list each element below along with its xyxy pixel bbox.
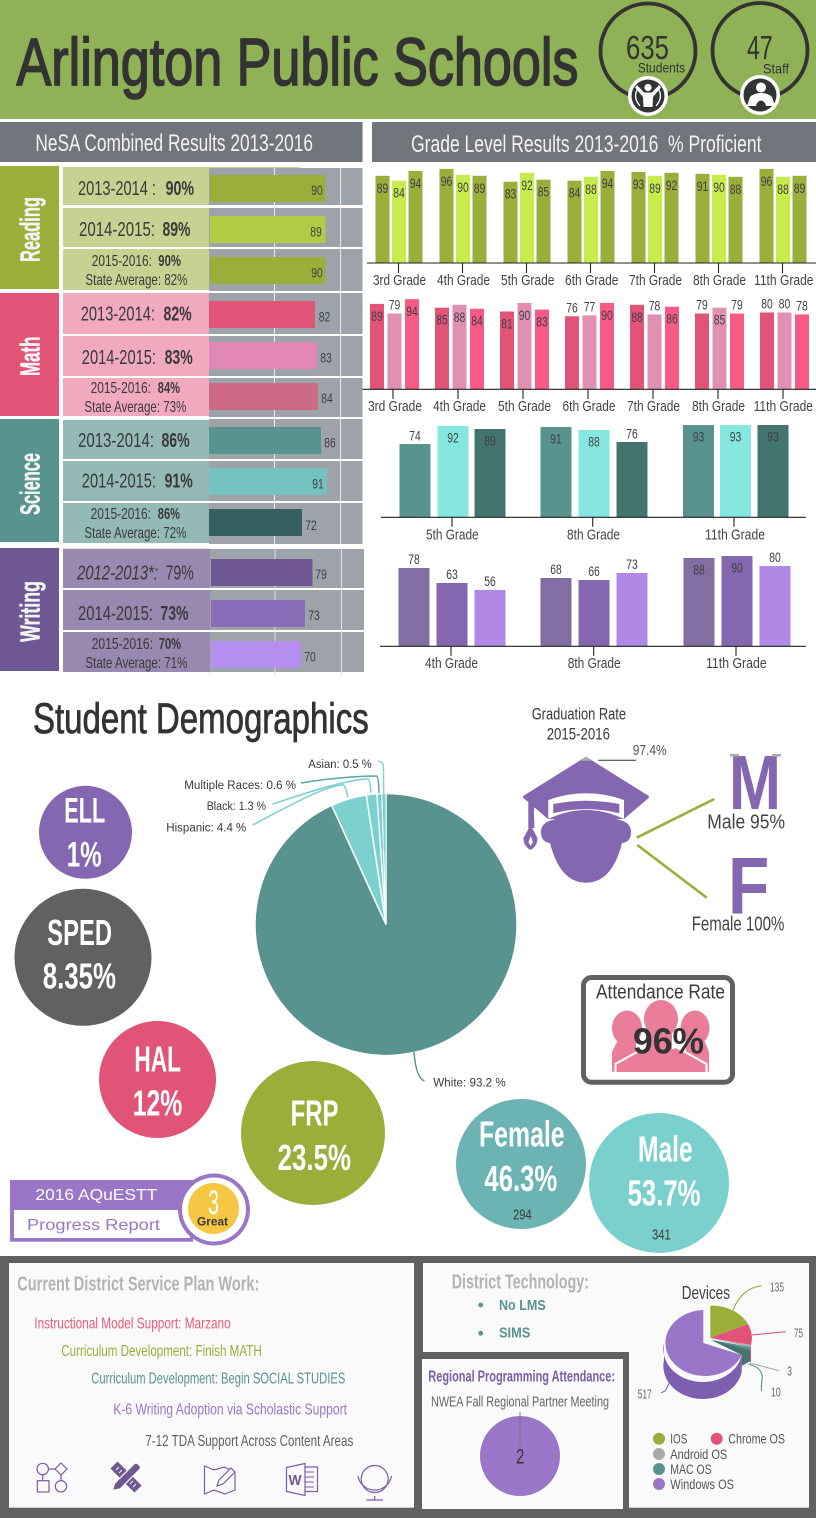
panel: writing combined results: 73% [160, 603, 189, 625]
bar chart: math by grade: 85 [714, 312, 725, 328]
bar chart: reading by grade: 89 [377, 180, 388, 196]
graduation rate [523, 704, 785, 936]
bar chart: math by grade: 85 [436, 312, 448, 328]
icon: staff reader [740, 75, 780, 115]
devices legend [653, 1432, 785, 1492]
bar chart: math by grade: 78 [796, 297, 808, 313]
graduation rate: Male 95% [707, 811, 785, 833]
bar chart: writing by grade: 8th Grade [568, 655, 621, 672]
icon: letter M: M [729, 740, 781, 826]
icon: letter F: F [728, 842, 769, 932]
bar chart: science by grade: 88 [588, 434, 600, 450]
bar chart: math by grade: 3rd Grade [368, 398, 422, 415]
bar chart: science by grade: 93 [693, 429, 704, 445]
bar chart: reading by grade: 85 [538, 184, 549, 200]
bar chart: math by grade: 78 [649, 297, 660, 313]
attendance rate callout: Attendance Rate [596, 982, 725, 1004]
panel: regional programming attendance: Regional Programming Attendance: [428, 1369, 615, 1386]
panel: reading combined results: 2015-2016: [92, 253, 152, 270]
stat circle: SPED [14, 889, 152, 1026]
panel: math combined results: 84% [158, 380, 180, 397]
graduation rate: Female 100% [692, 914, 784, 936]
panel: writing combined results: 2012-2013*: [76, 563, 158, 585]
bar chart: math by grade: 88 [454, 309, 465, 325]
bar chart: reading by grade: 90 [713, 179, 725, 195]
bar chart: writing by grade [380, 549, 806, 672]
bar chart: reading by grade: 89 [649, 180, 661, 196]
bar chart: math by grade: 79 [731, 296, 743, 312]
heading: student demographics: Student Demographics [33, 695, 369, 743]
bar chart: writing by grade: 68 [550, 561, 562, 577]
bar chart: reading by grade: 92 [521, 177, 533, 193]
title: Arlington Public Schools [16, 25, 578, 100]
bar chart: math by grade: 88 [631, 309, 643, 325]
bar chart: science by grade: 8th Grade [567, 526, 620, 543]
panel: writing combined results: 2015-2016: [92, 636, 153, 653]
stat circle: FRP: 23.5% [278, 1137, 351, 1178]
bar chart: reading by grade: 3rd Grade [373, 272, 426, 289]
heading: NeSA combined results [0, 122, 362, 162]
bar chart: science by grade: 91 [550, 431, 562, 447]
bar chart: math by grade [362, 296, 816, 415]
icon: pencil and ruler [110, 1461, 142, 1493]
panel: current district service plan work: Curriculum Development: Begin SOCIAL STUDIES [91, 1370, 345, 1387]
panel: current district service plan work: Current District Service Plan Work: [17, 1274, 259, 1296]
bar chart: writing by grade: 11th Grade [706, 655, 767, 672]
bar chart: reading by grade: 8th Grade [693, 272, 746, 289]
pie chart: regional attendance [480, 1412, 560, 1496]
students counter: Students [638, 60, 685, 76]
panel: science combined results: 2014-2015: [82, 471, 156, 493]
staff counter: Staff [763, 61, 789, 77]
bar chart: writing by grade: 73 [626, 556, 638, 572]
panel: math combined results: 82 [319, 309, 330, 325]
stat circle: SPED: 8.35% [43, 955, 116, 996]
panel: math combined results: 2014-2015: [82, 347, 156, 369]
panel: science combined results [0, 419, 362, 544]
3D pie chart: devices: 135 [770, 1280, 784, 1295]
bar chart: writing by grade: 66 [588, 563, 600, 579]
devices legend: IOS [670, 1432, 687, 1447]
bar chart: math by grade: 81 [501, 316, 513, 332]
devices legend: Android OS [670, 1447, 727, 1462]
pie chart: regional attendance: 2 [516, 1445, 524, 1468]
panel: reading combined results [0, 166, 362, 291]
panel: math combined results: 84 [321, 390, 333, 406]
panel: reading combined results: State Average: 82% [85, 272, 187, 289]
panel: science combined results: 72 [305, 517, 317, 533]
stat circle: male [589, 1113, 729, 1253]
bar chart: reading by grade: 88 [777, 181, 789, 197]
panel: current district service plan work: K-6 Writing Adoption via Scholastic Support [113, 1401, 347, 1418]
bar chart: reading by grade: 83 [505, 186, 516, 202]
staff counter: 47 [747, 29, 773, 66]
panel: science combined results: 86% [158, 506, 180, 523]
bar chart: science by grade: 74 [409, 428, 421, 444]
3D pie chart: devices: 3 [787, 1364, 792, 1379]
3D pie chart: devices: 517 [638, 1386, 652, 1401]
panel: district technology: District Technology: [452, 1271, 589, 1293]
bar chart: math by grade: 79 [696, 296, 708, 312]
panel: math combined results: 83 [320, 350, 332, 366]
panel: science combined results: State Average: 72% [84, 525, 186, 542]
bar chart: science by grade: 89 [484, 433, 496, 449]
bar chart: science by grade: 93 [730, 429, 741, 445]
panel: writing combined results: 70 [304, 649, 316, 665]
bar chart: reading by grade: 6th Grade [565, 272, 618, 289]
heading: grade level results [372, 122, 816, 162]
panel: science combined results: 2015-2016: [91, 506, 151, 523]
bar chart: writing by grade: 78 [408, 551, 420, 567]
bar chart: math by grade: 8th Grade [692, 398, 745, 415]
bar chart: reading by grade: 94 [410, 175, 421, 191]
bar chart: reading by grade: 84 [569, 185, 580, 201]
stat circle: HAL [99, 1021, 216, 1138]
bar chart: reading by grade: 89 [474, 180, 485, 196]
bar chart: reading by grade: 96 [441, 173, 452, 189]
bar chart: writing by grade: 56 [484, 573, 496, 589]
bar chart: science by grade [381, 425, 806, 543]
bar chart: math by grade: 79 [389, 296, 400, 312]
bar chart: math by grade: 84 [471, 313, 483, 329]
bar chart: writing by grade: 80 [769, 549, 781, 565]
panel: math combined results: 83% [165, 347, 193, 369]
panel: district technology: SIMS [499, 1325, 530, 1342]
icon: graduate with cap [523, 757, 649, 883]
panel: reading combined results: 2013-2014 : [78, 178, 156, 200]
panel: writing combined results: 73 [308, 607, 320, 623]
stat circle: male: Male [638, 1129, 693, 1170]
bar chart: math by grade: 89 [371, 308, 383, 324]
stat circle: HAL: HAL [134, 1039, 181, 1080]
panel: writing combined results: Writing [15, 581, 46, 642]
stat circle: female: 294 [513, 1206, 532, 1223]
bar chart: writing by grade: 4th Grade [425, 655, 478, 672]
bar chart: science by grade: 11th Grade [705, 526, 765, 543]
stat circle: SPED: SPED [47, 912, 112, 953]
panel: math combined results: 2015-2016: [91, 380, 151, 397]
panel: science combined results: 86 [324, 435, 336, 451]
panel: current district service plan work: Instructional Model Support: Marzano [34, 1315, 231, 1332]
panel: writing combined results: 2014-2015: [78, 603, 153, 625]
panel: writing combined results: 79% [166, 563, 194, 585]
panel: reading combined results: 90% [158, 253, 181, 270]
bar chart: science by grade: 93 [767, 429, 779, 445]
bar chart: math by grade: 5th Grade [498, 398, 551, 415]
heading: NeSA combined results: NeSA Combined Results 2013-2016 [35, 130, 313, 157]
students counter: 635 [626, 29, 669, 66]
bar chart: reading by grade: 88 [730, 181, 741, 197]
panel: writing combined results: 79 [315, 566, 327, 582]
panel: writing combined results: State Average: 71% [85, 655, 187, 672]
devices legend: Chrome OS [728, 1432, 785, 1447]
bar chart: reading by grade: 96 [761, 173, 772, 189]
bar chart: reading by grade [367, 169, 816, 289]
bar chart: reading by grade: 89 [794, 180, 805, 196]
panel: math combined results: Math [15, 336, 46, 376]
panel: science combined results: 2013-2014: [78, 430, 154, 452]
bar chart: math by grade: 77 [584, 298, 595, 314]
stat circle: ELL: 1% [67, 836, 102, 875]
bar chart: reading by grade: 88 [585, 181, 597, 197]
bar chart: reading by grade: 92 [666, 177, 677, 193]
panel: reading combined results: 89 [310, 224, 322, 240]
icon: child [628, 76, 668, 116]
bar chart: reading by grade: 7th Grade [629, 272, 682, 289]
bar chart: reading by grade: 84 [393, 185, 405, 201]
pie chart: student race: Hispanic: 4.4 % [166, 822, 246, 834]
icon: Word document [286, 1464, 318, 1496]
panel: science combined results: Science [15, 453, 46, 515]
stat circle: FRP: FRP [291, 1093, 338, 1134]
panel: current district service plan work [9, 1263, 414, 1508]
bar chart: science by grade: 92 [447, 430, 459, 446]
stat circle: female: Female [479, 1114, 565, 1155]
stat circle: male: 341 [652, 1227, 671, 1244]
bar chart: science by grade: 5th Grade [426, 526, 479, 543]
graduation rate: 97.4% [633, 743, 667, 759]
bar chart: writing by grade: 88 [693, 561, 705, 577]
3D pie chart: devices [638, 1280, 803, 1401]
attendance rate callout [584, 978, 732, 1082]
icon: flow diagram [37, 1463, 67, 1492]
stat circle: ELL [39, 786, 132, 879]
bar chart: math by grade: 6th Grade [562, 398, 616, 415]
bar chart: math by grade: 7th Grade [627, 398, 680, 415]
graduation rate: Graduation Rate [532, 704, 626, 723]
panel: current district service plan work: Curriculum Development: Finish MATH [61, 1343, 262, 1360]
bar chart: reading by grade: 93 [633, 176, 644, 192]
bar chart: math by grade: 80 [761, 296, 773, 312]
bar chart: math by grade: 83 [536, 314, 548, 330]
3D pie chart: devices: 75 [794, 1326, 803, 1341]
panel: district technology: No LMS [499, 1297, 546, 1314]
panel: reading combined results: Reading [15, 197, 46, 262]
panel: science combined results: 86% [162, 430, 190, 452]
panel: reading combined results: 89% [162, 219, 191, 241]
bar chart: reading by grade: 94 [602, 175, 613, 191]
pie chart: student race: White: 93.2 % [433, 1078, 506, 1090]
bar chart: math by grade: 4th Grade [433, 398, 486, 415]
bar chart: math by grade: 90 [601, 307, 613, 323]
panel: reading combined results: 90 [311, 182, 323, 198]
bar chart: reading by grade: 5th Grade [501, 272, 554, 289]
students counter [600, 4, 696, 116]
panel: reading combined results: 90% [166, 178, 194, 200]
panel: science combined results: 91% [165, 471, 193, 493]
bar chart: math by grade: 86 [666, 311, 678, 327]
panel: district technology [423, 1263, 809, 1508]
panel: writing combined results [0, 548, 364, 675]
bar chart: math by grade: 76 [566, 299, 578, 315]
header band [0, 0, 816, 119]
bar chart: math by grade: 90 [519, 307, 530, 323]
AQuESTT progress report badge: Great [197, 1214, 228, 1228]
AQuESTT progress report badge [10, 1174, 250, 1246]
bar chart: math by grade: 80 [779, 296, 790, 312]
AQuESTT progress report badge: Progress Report [27, 1217, 161, 1234]
panel: regional programming attendance: NWEA Fall Regional Partner Meeting [431, 1394, 609, 1411]
bar chart: reading by grade: 4th Grade [437, 272, 490, 289]
panel: writing combined results: 70% [159, 636, 181, 653]
3D pie chart: devices: 10 [771, 1385, 781, 1400]
panel: science combined results: 91 [312, 476, 324, 492]
bar chart: reading by grade: 90 [457, 179, 469, 195]
panel: math combined results: 82% [164, 304, 192, 326]
icon: Word document: W [288, 1472, 302, 1489]
AQuESTT progress report badge: 3 [208, 1184, 219, 1222]
icon: map and pencil [204, 1466, 235, 1494]
stat circle: male: 53.7% [628, 1173, 700, 1214]
panel: math combined results: 2013-2014: [81, 304, 155, 326]
AQuESTT progress report badge: 2016 AQuESTT [35, 1187, 158, 1204]
panel: reading combined results: 90 [311, 265, 323, 281]
pie chart: student race [166, 759, 517, 1090]
stat circle: FRP [241, 1061, 385, 1205]
panel: district technology: Devices [682, 1283, 730, 1303]
panel: current district service plan work: 7-12 TDA Support Across Content Areas [145, 1433, 353, 1450]
pie chart: student race: Asian: 0.5 % [308, 759, 372, 771]
panel: reading combined results: 2014-2015: [79, 219, 155, 241]
pie chart: student race: Black: 1.3 % [207, 801, 266, 813]
footer band [0, 1256, 816, 1518]
panel: regional programming attendance [422, 1359, 623, 1509]
devices legend: MAC OS [670, 1462, 712, 1477]
devices legend: Windows OS [670, 1477, 734, 1492]
icon: group of people [612, 1000, 710, 1073]
attendance rate callout: 96% [633, 1020, 704, 1061]
staff counter [712, 3, 808, 115]
bar chart: science by grade: 76 [626, 426, 638, 442]
panel: math combined results [0, 293, 362, 417]
stat circle: ELL: ELL [64, 792, 105, 831]
stat circle: HAL: 12% [133, 1083, 182, 1124]
bar chart: writing by grade: 90 [731, 559, 743, 575]
graduation rate: 2015-2016 [547, 724, 610, 743]
stat circle: female [456, 1099, 586, 1229]
bar chart: math by grade: 94 [406, 303, 418, 319]
stat circle: female: 46.3% [484, 1158, 557, 1199]
panel: math combined results: State Average: 73% [84, 399, 186, 416]
bar chart: reading by grade: 91 [697, 178, 708, 194]
icon: mirror [358, 1466, 392, 1500]
pie chart: student race: Multiple Races: 0.6 % [184, 780, 296, 792]
bar chart: writing by grade: 63 [446, 566, 458, 582]
